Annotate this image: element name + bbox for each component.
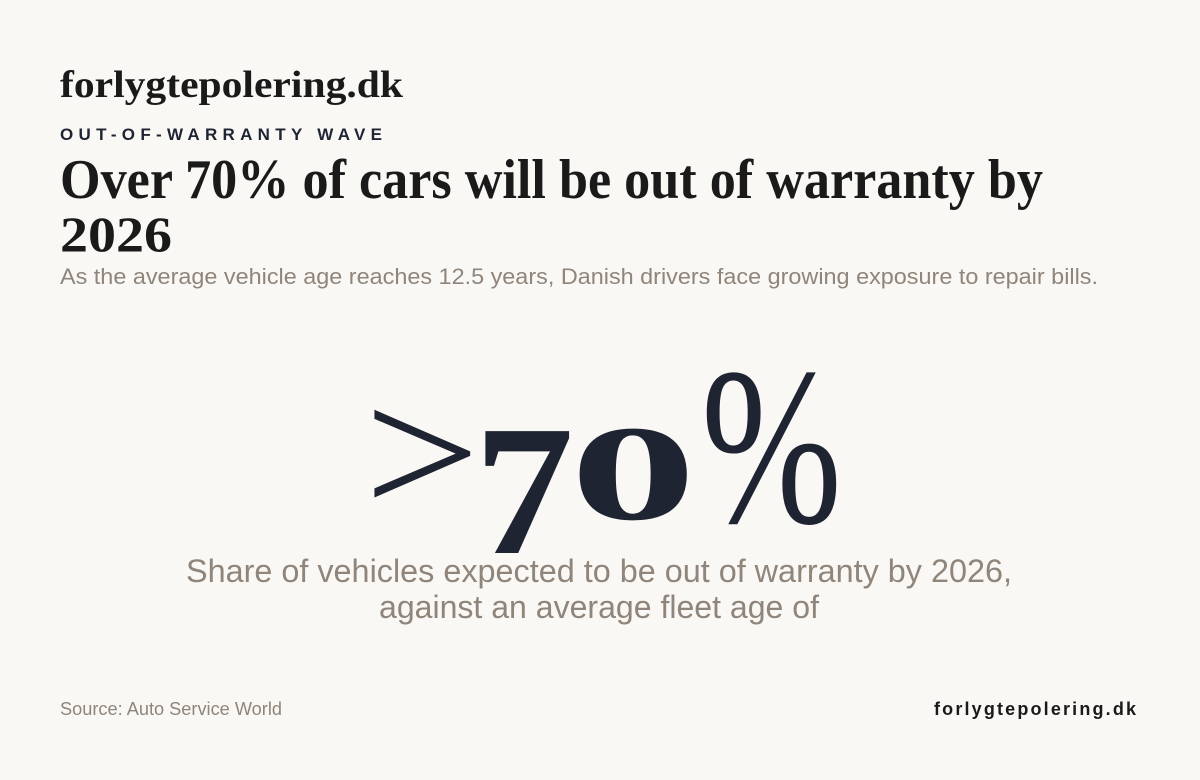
stat caption: Share of vehicles expected to be out of warranty by 2026, <box>186 553 1012 589</box>
big stat: % <box>701 323 842 572</box>
big stat: 0 <box>570 398 696 548</box>
big stat <box>364 323 842 593</box>
subheading: As the average vehicle age reaches 12.5 years, Danish drivers face growing exposure to repair bills. <box>60 264 1098 289</box>
source: Source: Auto Service World <box>60 699 282 719</box>
headline: Over 70% of cars will be out of warranty by <box>60 149 1043 211</box>
big stat: > <box>364 353 480 554</box>
brand name: forlygtepolering.dk <box>60 64 404 106</box>
headline <box>60 149 1043 262</box>
stat caption: against an average fleet age of <box>379 589 819 625</box>
footer brand: forlygtepolering.dk <box>934 699 1137 719</box>
big stat: 7 <box>474 387 574 593</box>
stat caption <box>186 553 1012 625</box>
eyebrow label: OUT-OF-WARRANTY WAVE <box>60 125 382 144</box>
headline: 2026 <box>60 206 172 262</box>
